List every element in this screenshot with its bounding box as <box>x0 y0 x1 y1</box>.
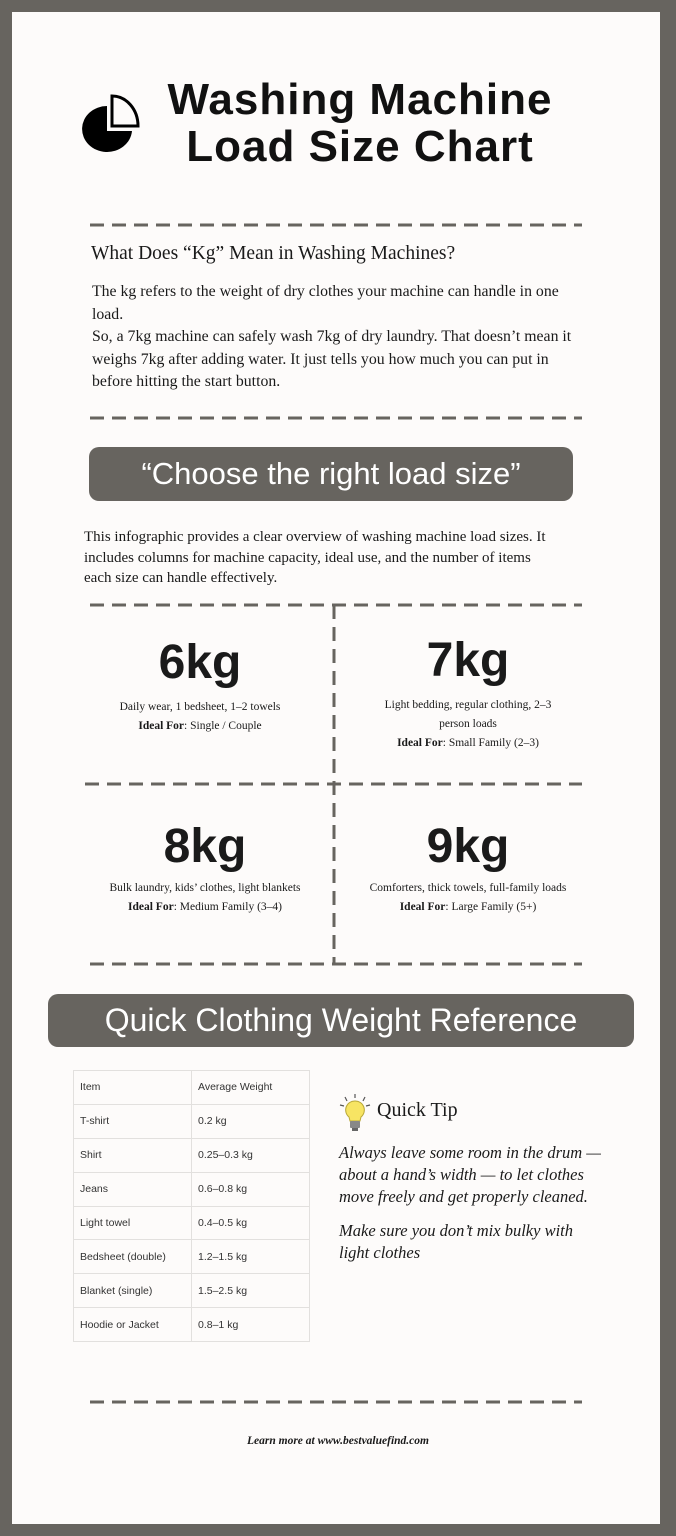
text block: intro: This infographic provides a clear overview of washing machine load sizes. It includes columns for machine capacity, ideal use, and the number of items each size can handle effectively. <box>84 529 546 586</box>
panel: 7kg: 7kg <box>427 634 509 687</box>
table: clothing weights: Item <box>80 1081 100 1093</box>
title: Load Size Chart <box>186 122 534 171</box>
footer: Learn more at www.bestvaluefind.com <box>247 1435 429 1447</box>
panel: 8kg: Ideal For: Medium Family (3–4) <box>128 901 282 913</box>
panel: 8kg <box>109 820 300 913</box>
table: clothing weights: 1.5–2.5 kg <box>198 1285 247 1297</box>
text block: tip <box>338 1143 601 1262</box>
table: clothing weights: Light towel <box>80 1217 130 1229</box>
table: clothing weights: 0.6–0.8 kg <box>198 1183 247 1195</box>
table: clothing weights: 0.25–0.3 kg <box>198 1149 253 1161</box>
text block: tip: Make sure you don’t mix bulky with light clothes <box>339 1221 573 1262</box>
text block: kg explanation: So, a 7kg machine can safely wash 7kg of dry laundry. That doesn’t mean it weighs 7kg after adding water. It just tells you how much you can put in before hitting the start button. <box>92 328 571 390</box>
heading: kg meaning: What Does “Kg” Mean in Washing Machines? <box>91 243 455 264</box>
panel: 8kg: 8kg <box>164 820 246 873</box>
panel: 7kg <box>384 634 551 749</box>
panel: 9kg <box>370 820 566 913</box>
table: clothing weights: Average Weight <box>198 1081 272 1093</box>
panel: 8kg: Bulk laundry, kids’ clothes, light blankets <box>109 882 300 894</box>
panel: 7kg: Light bedding, regular clothing, 2–3 person loads <box>385 699 551 730</box>
table: clothing weights: 0.8–1 kg <box>198 1319 238 1331</box>
icon: light bulb <box>340 1094 370 1131</box>
panel: 9kg: Ideal For: Large Family (5+) <box>400 901 536 913</box>
text block: tip: Always leave some room in the drum — about a hand’s width — to let clothes move freely and get properly cleaned. <box>339 1143 601 1206</box>
table: clothing weights: Shirt <box>80 1149 102 1161</box>
panel: 9kg: Comforters, thick towels, full-family loads <box>370 882 566 894</box>
text block: kg explanation <box>92 283 572 390</box>
title <box>168 75 552 171</box>
table: clothing weights: 0.4–0.5 kg <box>198 1217 247 1229</box>
table: clothing weights: 0.2 kg <box>198 1115 227 1127</box>
table: clothing weights: Jeans <box>80 1183 108 1195</box>
table: clothing weights: Hoodie or Jacket <box>80 1319 159 1331</box>
panel: 6kg: 6kg <box>159 636 241 689</box>
panel: 7kg: Ideal For: Small Family (2–3) <box>397 737 539 749</box>
icon: pie chart <box>82 94 140 152</box>
pill heading: choose load size: “Choose the right load size” <box>141 456 521 491</box>
panel: 6kg: Ideal For: Single / Couple <box>138 720 262 732</box>
panel: 6kg: Daily wear, 1 bedsheet, 1–2 towels <box>120 701 280 713</box>
title: Washing Machine <box>168 75 552 124</box>
table: clothing weights <box>73 1070 310 1342</box>
pill heading: quick clothing weight: Quick Clothing Weight Reference <box>105 1002 577 1038</box>
panel: 6kg <box>120 636 280 732</box>
pill heading: quick clothing weight <box>48 994 634 1047</box>
heading: quick tip: Quick Tip <box>377 1099 458 1121</box>
panel: 9kg: 9kg <box>427 820 509 873</box>
table: clothing weights: T-shirt <box>80 1115 109 1127</box>
pill heading: choose load size <box>89 447 573 501</box>
text block: kg explanation: The kg refers to the weight of dry clothes your machine can handle in one load. <box>92 283 559 322</box>
table: clothing weights: Bedsheet (double) <box>80 1251 166 1263</box>
table: clothing weights: 1.2–1.5 kg <box>198 1251 247 1263</box>
table: clothing weights: Blanket (single) <box>80 1285 152 1297</box>
